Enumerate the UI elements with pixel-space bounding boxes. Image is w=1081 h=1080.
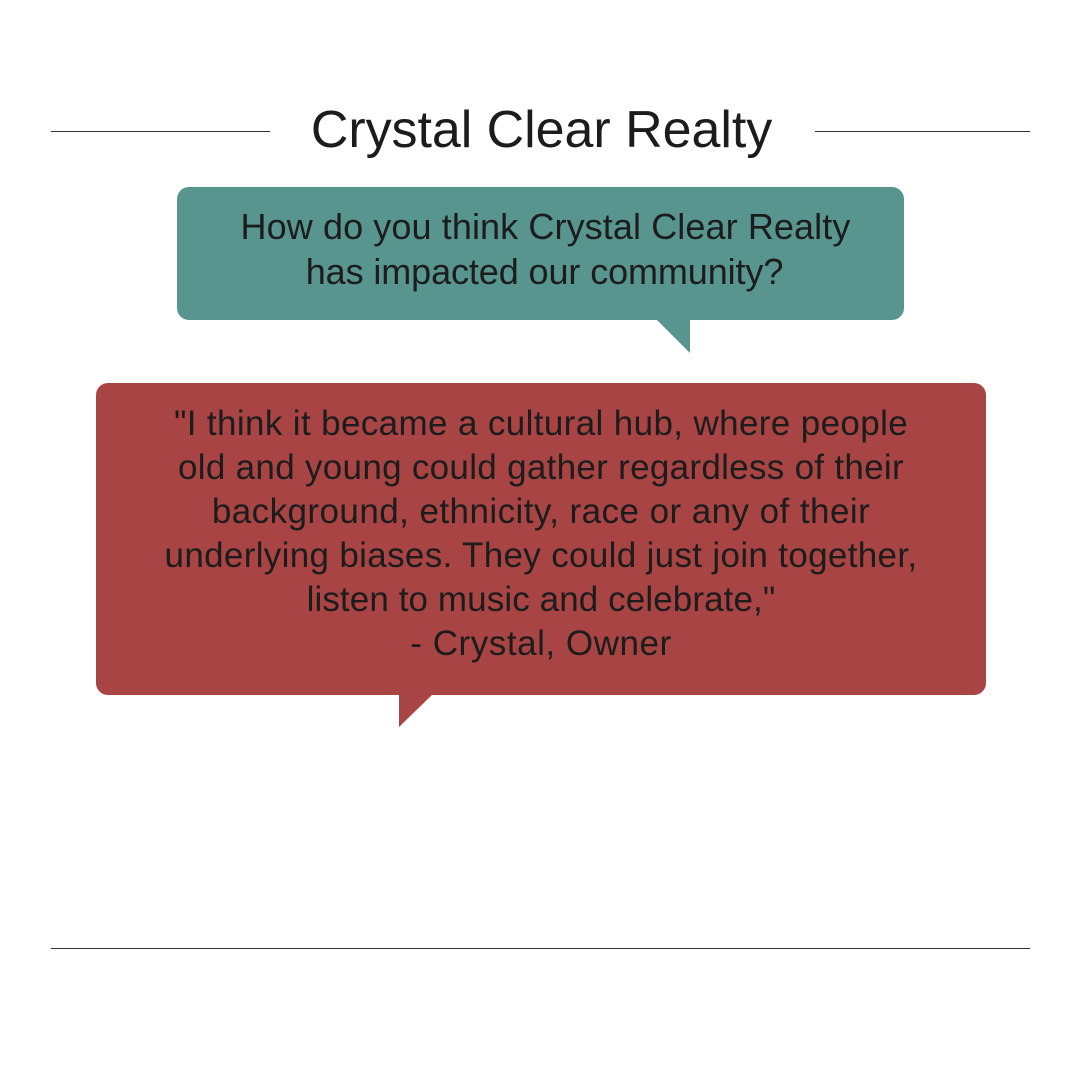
- quote text: listen to music and celebrate,": [307, 580, 775, 619]
- quote text: [165, 404, 917, 663]
- title: Crystal Clear Realty: [311, 101, 772, 159]
- question text: [241, 206, 850, 292]
- quote text: underlying biases. They could just join together,: [165, 536, 917, 575]
- quote text: "I think it became a cultural hub, where people: [174, 404, 908, 443]
- quote text: background, ethnicity, race or any of their: [212, 492, 870, 531]
- speech bubble: answer quote: [96, 383, 986, 727]
- question text: How do you think Crystal Clear Realty: [241, 206, 850, 247]
- speech bubble: question: [177, 187, 904, 353]
- quote text: old and young could gather regardless of their: [178, 448, 904, 487]
- question text: has impacted our community?: [306, 251, 783, 292]
- quote text: - Crystal, Owner: [410, 624, 672, 663]
